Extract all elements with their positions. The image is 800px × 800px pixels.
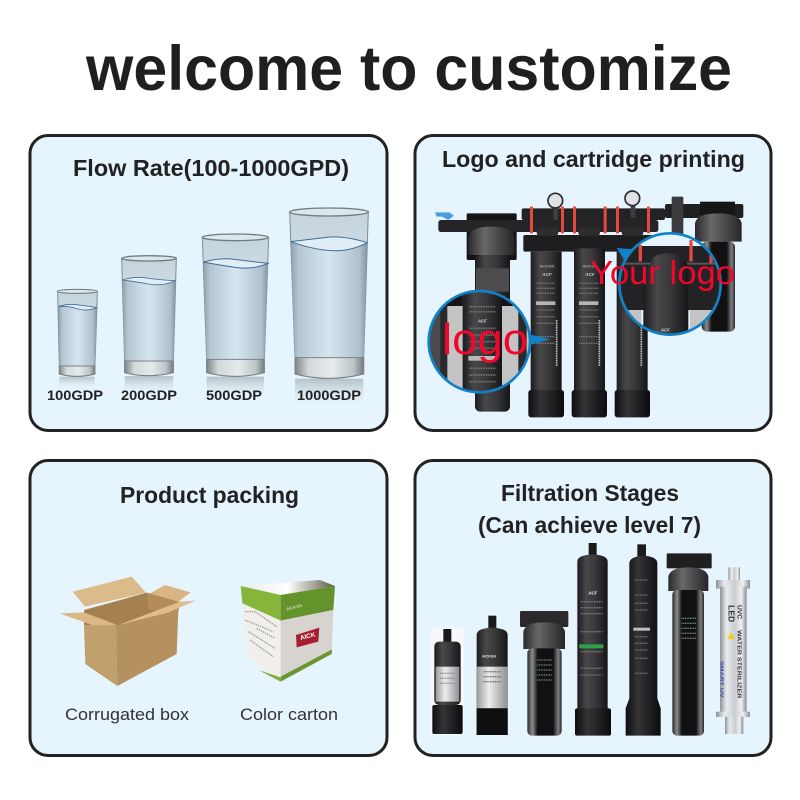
pipework and gauges: [435, 191, 743, 260]
chart: four glasses: [57, 208, 368, 409]
crossbar: [523, 235, 655, 252]
cartridges: AICKSN: [583, 263, 598, 268]
filter lineup: [431, 543, 750, 736]
filter stage 1: [431, 627, 464, 735]
icon: color carton: AICK: [299, 631, 317, 642]
filter: left housing: [468, 227, 514, 412]
glass: 500GDP: [202, 234, 269, 400]
filter stage 6: [667, 553, 712, 736]
filter stage 2: [477, 616, 508, 735]
illustration: filter system: [428, 191, 743, 417]
panel: logo and cartridge printing: [415, 136, 771, 430]
filter: right housing: [695, 202, 742, 332]
icon: color carton: [241, 580, 335, 682]
overlay text: your logo: Your logo: [590, 254, 735, 291]
callout: cartridge logo magnifier: ACF: [477, 319, 487, 324]
icon: color carton: AICKSN: [286, 603, 303, 612]
callout: cartridge logo magnifier: [428, 290, 530, 393]
heading: level note: (Can achieve level 7): [478, 512, 701, 538]
filter stage 4: ACF: [587, 590, 597, 595]
title: welcome to customize: [85, 34, 732, 104]
panel: product packing: [30, 460, 387, 756]
filter stage 7: UV sterilizer: LED: [726, 605, 736, 622]
label: 200GDP: 200GDP: [121, 387, 177, 403]
panel background: logo printing: [415, 136, 771, 430]
callout: housing logo magnifier: ACF: [660, 327, 670, 332]
glass: 1000GDP: [290, 208, 368, 409]
label: 1000GDP: 1000GDP: [297, 387, 361, 403]
cartridges: AICKSN: [540, 263, 555, 268]
label: corrugated box: Corrugated box: [65, 705, 190, 724]
glass: 100GDP: [57, 289, 97, 390]
cartridges: ACF: [584, 272, 595, 277]
filter stage 7: UV sterilizer: WATER STERILIZER: [735, 630, 741, 698]
filter stage 2: AICKSN: [482, 655, 496, 659]
filter stage 5: [626, 544, 661, 736]
filter stage 3: [520, 611, 568, 736]
filter stage 7: UV sterilizer: SMART UV: [719, 661, 725, 699]
arrow: right callout pointer: [617, 248, 635, 259]
cartridges: [528, 227, 650, 417]
heading: logo printing: Logo and cartridge printing: [442, 146, 745, 172]
icon: corrugated box: [59, 577, 196, 686]
filter stage 7: UV sterilizer: [716, 567, 750, 734]
filter stage 7: UV sterilizer: UVC: [735, 605, 742, 619]
panel background: flow rate: [30, 136, 387, 430]
heading: filtration stages: Filtration Stages: [501, 480, 679, 506]
label: 100GDP: 100GDP: [47, 387, 103, 403]
heading: packing: Product packing: [120, 482, 299, 508]
label: 500GDP: 500GDP: [206, 387, 262, 403]
panel background: packing: [30, 460, 387, 756]
arrow: left callout pointer: [530, 334, 550, 345]
panel: filtration stages: [415, 460, 771, 756]
overlay text: logo: logo: [442, 315, 528, 364]
heading: flow rate: Flow Rate(100-1000GPD): [73, 155, 349, 181]
callout: housing logo magnifier: [619, 233, 721, 337]
panel background: filtration: [415, 460, 771, 756]
glass: 200GDP: [122, 256, 176, 396]
filter stage 4: [575, 543, 611, 736]
cartridges: ACF: [541, 272, 552, 277]
label: color carton: Color carton: [240, 705, 338, 724]
panel: flow rate: [30, 136, 387, 430]
